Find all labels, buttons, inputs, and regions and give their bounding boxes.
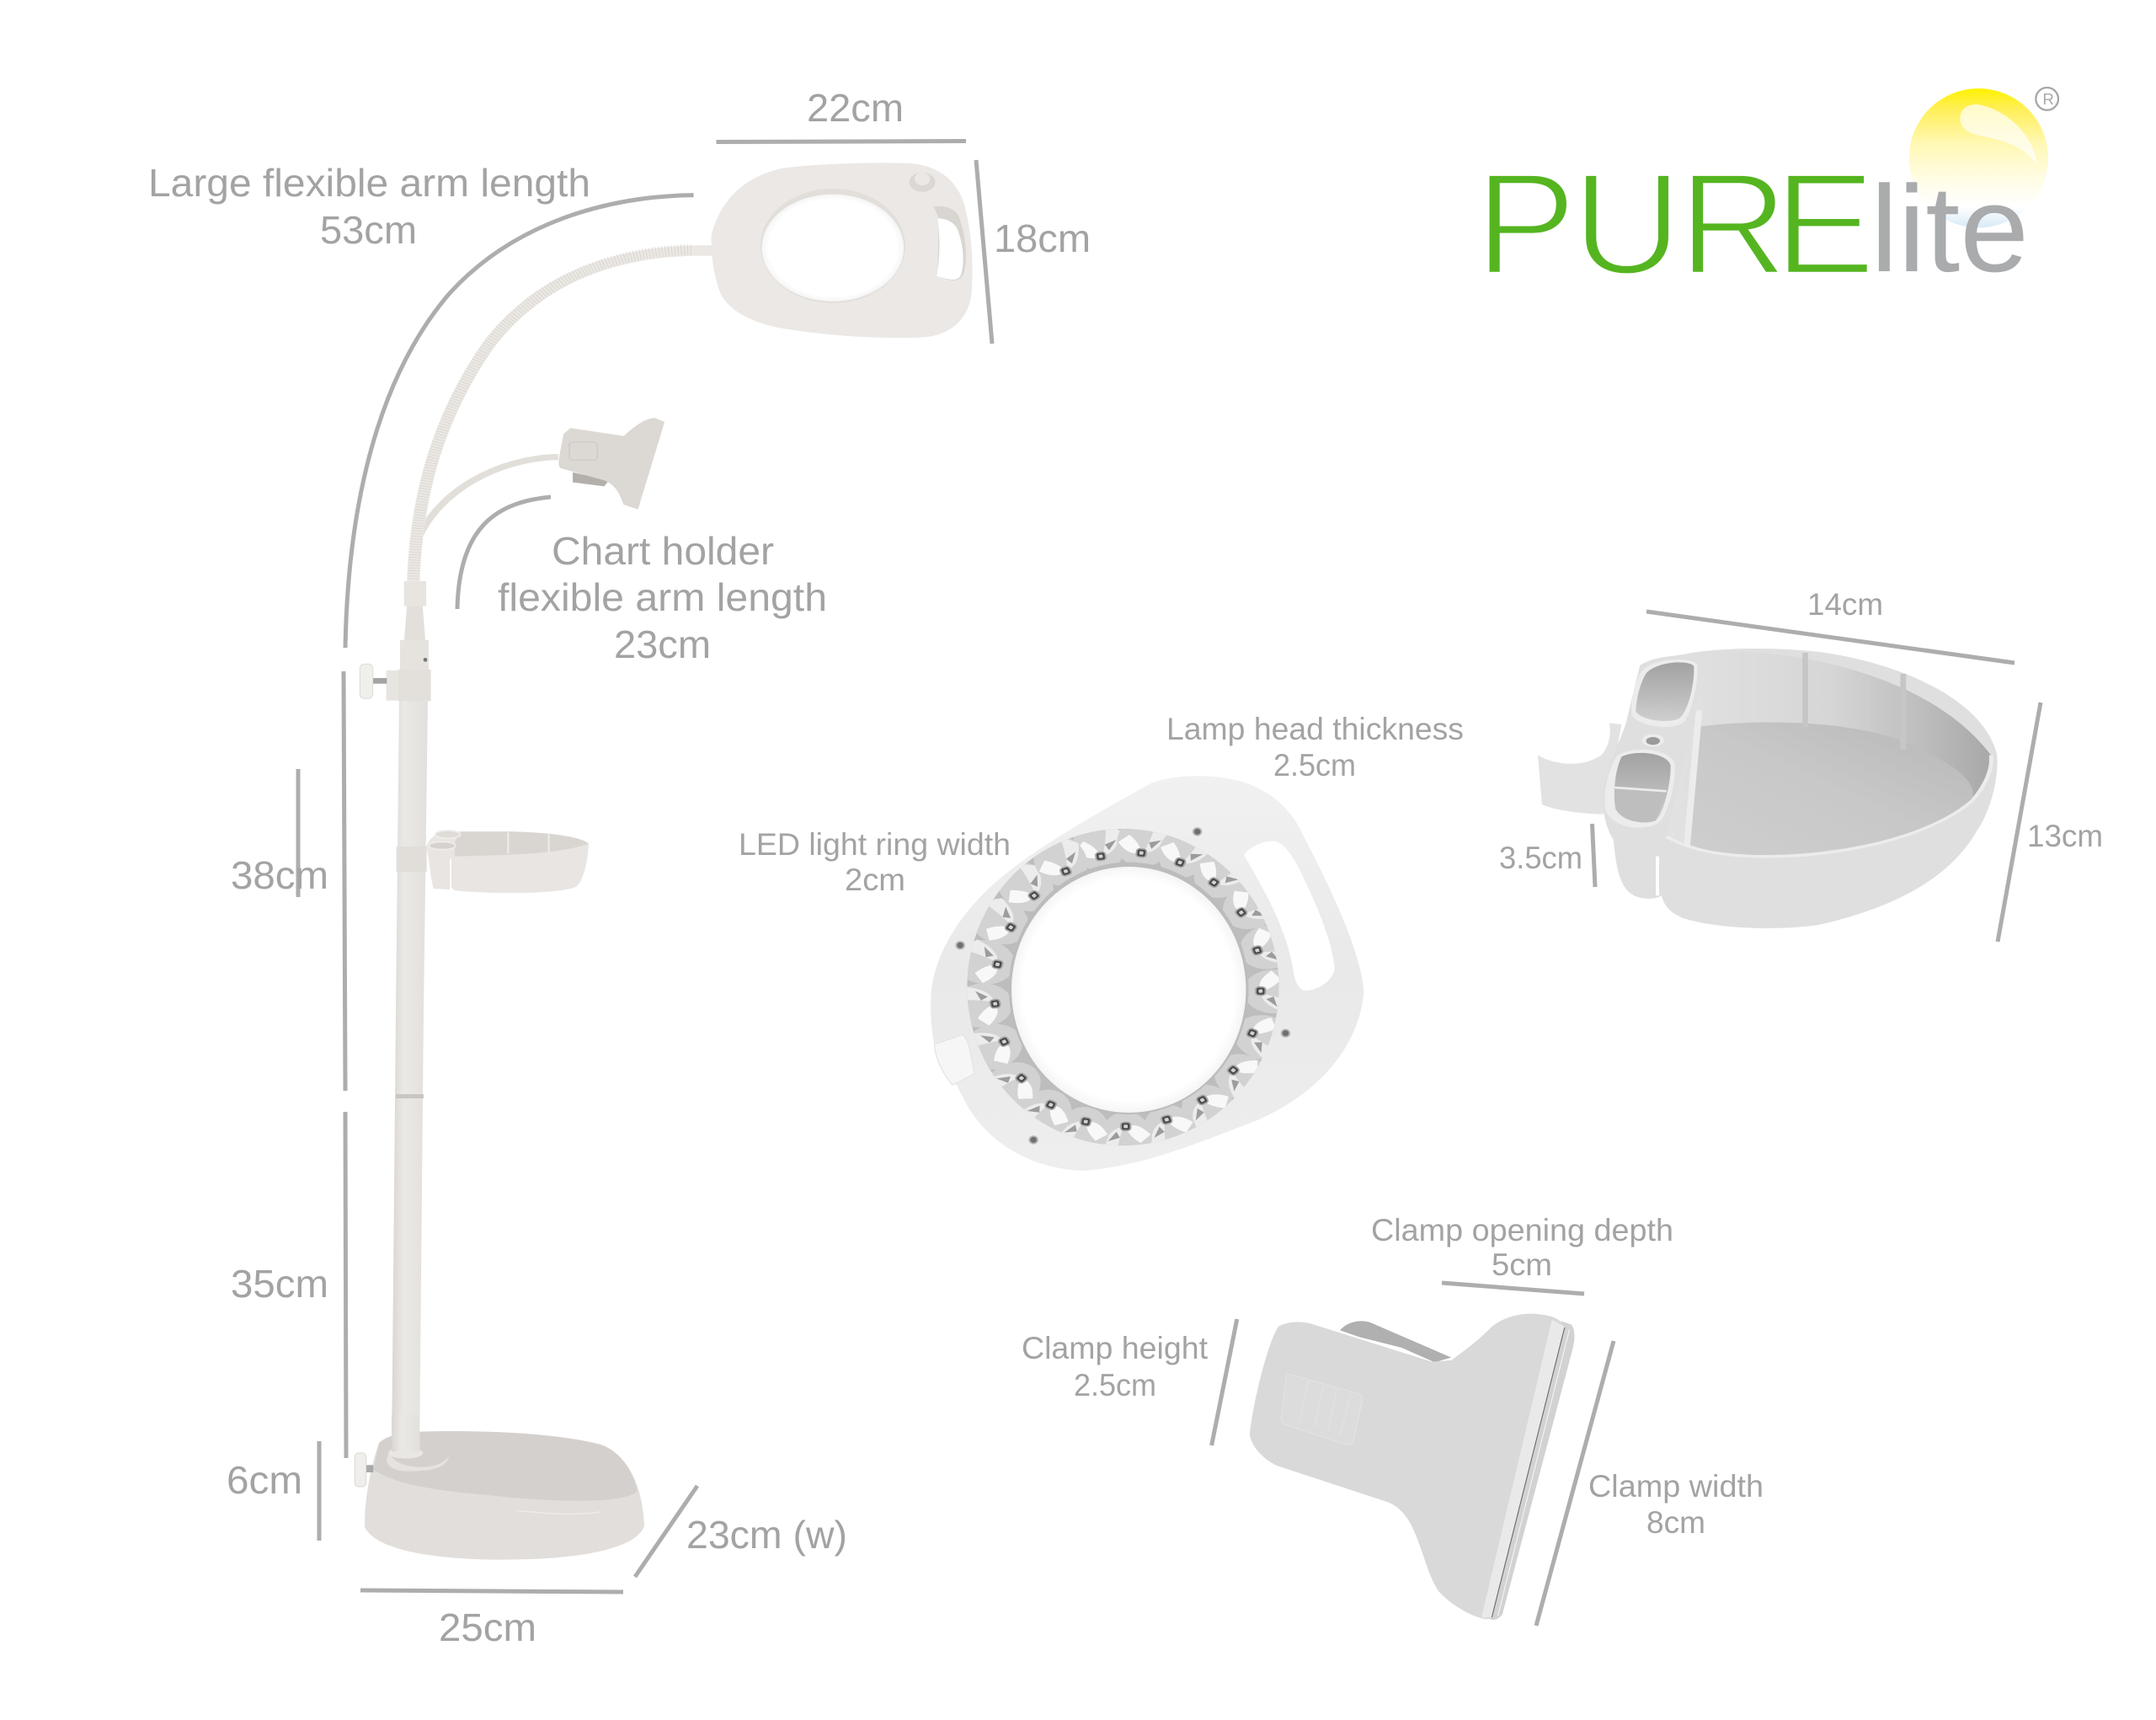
lamp head body [931, 776, 1364, 1171]
clamp detail [1250, 1314, 1574, 1620]
clamp grip [1281, 1375, 1363, 1445]
dimension: base width 23cm [635, 1486, 847, 1577]
clamp body [1250, 1314, 1565, 1619]
dimension: base width 23cm: 23cm (w) [686, 1513, 847, 1557]
magnifier lens [1009, 863, 1249, 1114]
LED ring [967, 829, 1278, 1146]
label: clamp height: Clamp height [1022, 1331, 1209, 1365]
dimension: chart holder flexible arm length [457, 497, 827, 666]
label: lamp head thickness: 2.5cm [1273, 748, 1356, 783]
label: clamp height: 2.5cm [1074, 1368, 1156, 1402]
tray body [1603, 649, 1998, 928]
label: lamp head thickness: Lamp head thickness [1166, 712, 1464, 746]
dimension: tray length 14cm: 14cm [1807, 587, 1883, 622]
logo wordmark PURE: PURE [1475, 143, 1876, 305]
lower pen holder [1604, 750, 1675, 828]
label: LED light ring width: LED light ring width [739, 827, 1011, 862]
lamp flexible arm [414, 249, 713, 587]
dimension: large flexible arm length: Large flexible arm length [148, 161, 590, 205]
dimension: base length 25cm: 25cm [439, 1605, 536, 1649]
lamp base [355, 1415, 644, 1560]
accessory tray detail [1538, 649, 1998, 928]
floor lamp product [355, 163, 973, 1560]
logo: PURElite [1475, 88, 2058, 305]
dimension: chart holder flexible arm length: Chart holder [552, 529, 774, 573]
dimension: lower pole 35cm: 35cm [231, 1262, 328, 1306]
lamp head [712, 163, 973, 338]
dimension: holder depth 3.5cm [1499, 824, 1595, 887]
dimension: chart holder flexible arm length: flexible arm length [498, 575, 827, 619]
flexible arms, lamp head and clamp [404, 163, 973, 606]
logo sun: R [2042, 90, 2054, 108]
label: lamp head thickness [1166, 712, 1464, 783]
logo wordmark lite: lite [1870, 160, 2029, 297]
telescopic clamp and knob [360, 604, 431, 701]
dimension: large flexible arm length [148, 161, 694, 648]
dimension: chart holder flexible arm length: 23cm [614, 622, 711, 666]
clamp spring [1340, 1321, 1451, 1362]
dimension: upper pole 38cm: 38cm [231, 853, 328, 897]
dimension: tray width 13cm: 13cm [2027, 819, 2103, 853]
label: LED light ring width: 2cm [845, 863, 905, 897]
dimension: lamp head width 22cm: 22cm [807, 86, 904, 130]
dimension: holder depth 3.5cm: 3.5cm [1499, 841, 1582, 875]
tray clip strap [1538, 723, 1621, 815]
side button [934, 1034, 974, 1085]
lamp pole [392, 699, 428, 1456]
label: clamp opening depth: 5cm [1492, 1247, 1552, 1282]
label: clamp width [1536, 1341, 1764, 1626]
dimension: lamp head height 18cm: 18cm [994, 216, 1091, 260]
label: clamp height [1022, 1319, 1237, 1445]
arm collar [404, 581, 426, 606]
chart holder flexible arm [412, 457, 558, 587]
label: clamp opening depth [1371, 1213, 1673, 1294]
label: clamp width: 8cm [1646, 1505, 1705, 1540]
upper pen holder [1631, 660, 1697, 727]
dimension: large flexible arm length: 53cm [320, 208, 417, 252]
small tray on pole [397, 831, 589, 893]
dimension: tray width 13cm [1998, 702, 2103, 942]
screws [956, 828, 1289, 1144]
tray interior [1667, 651, 1991, 857]
label: clamp opening depth: Clamp opening depth [1371, 1213, 1673, 1247]
chart holder clamp [558, 418, 664, 510]
dimension: base height 6cm: 6cm [227, 1458, 302, 1502]
dimension: lamp head height 18cm [976, 160, 1091, 344]
small round hole [1642, 734, 1664, 746]
handle hole [1244, 841, 1335, 991]
pole joint [396, 1094, 424, 1098]
dimension: base height 6cm [227, 1441, 319, 1541]
clamp metal edge [1489, 1321, 1574, 1620]
LED lamp head detail [931, 776, 1364, 1171]
logo sun [1909, 88, 2058, 227]
tray seam [1654, 857, 1661, 895]
label: LED light ring width [739, 827, 1011, 897]
label: clamp width: Clamp width [1588, 1469, 1764, 1504]
dimension: tray length 14cm [1646, 587, 2015, 663]
